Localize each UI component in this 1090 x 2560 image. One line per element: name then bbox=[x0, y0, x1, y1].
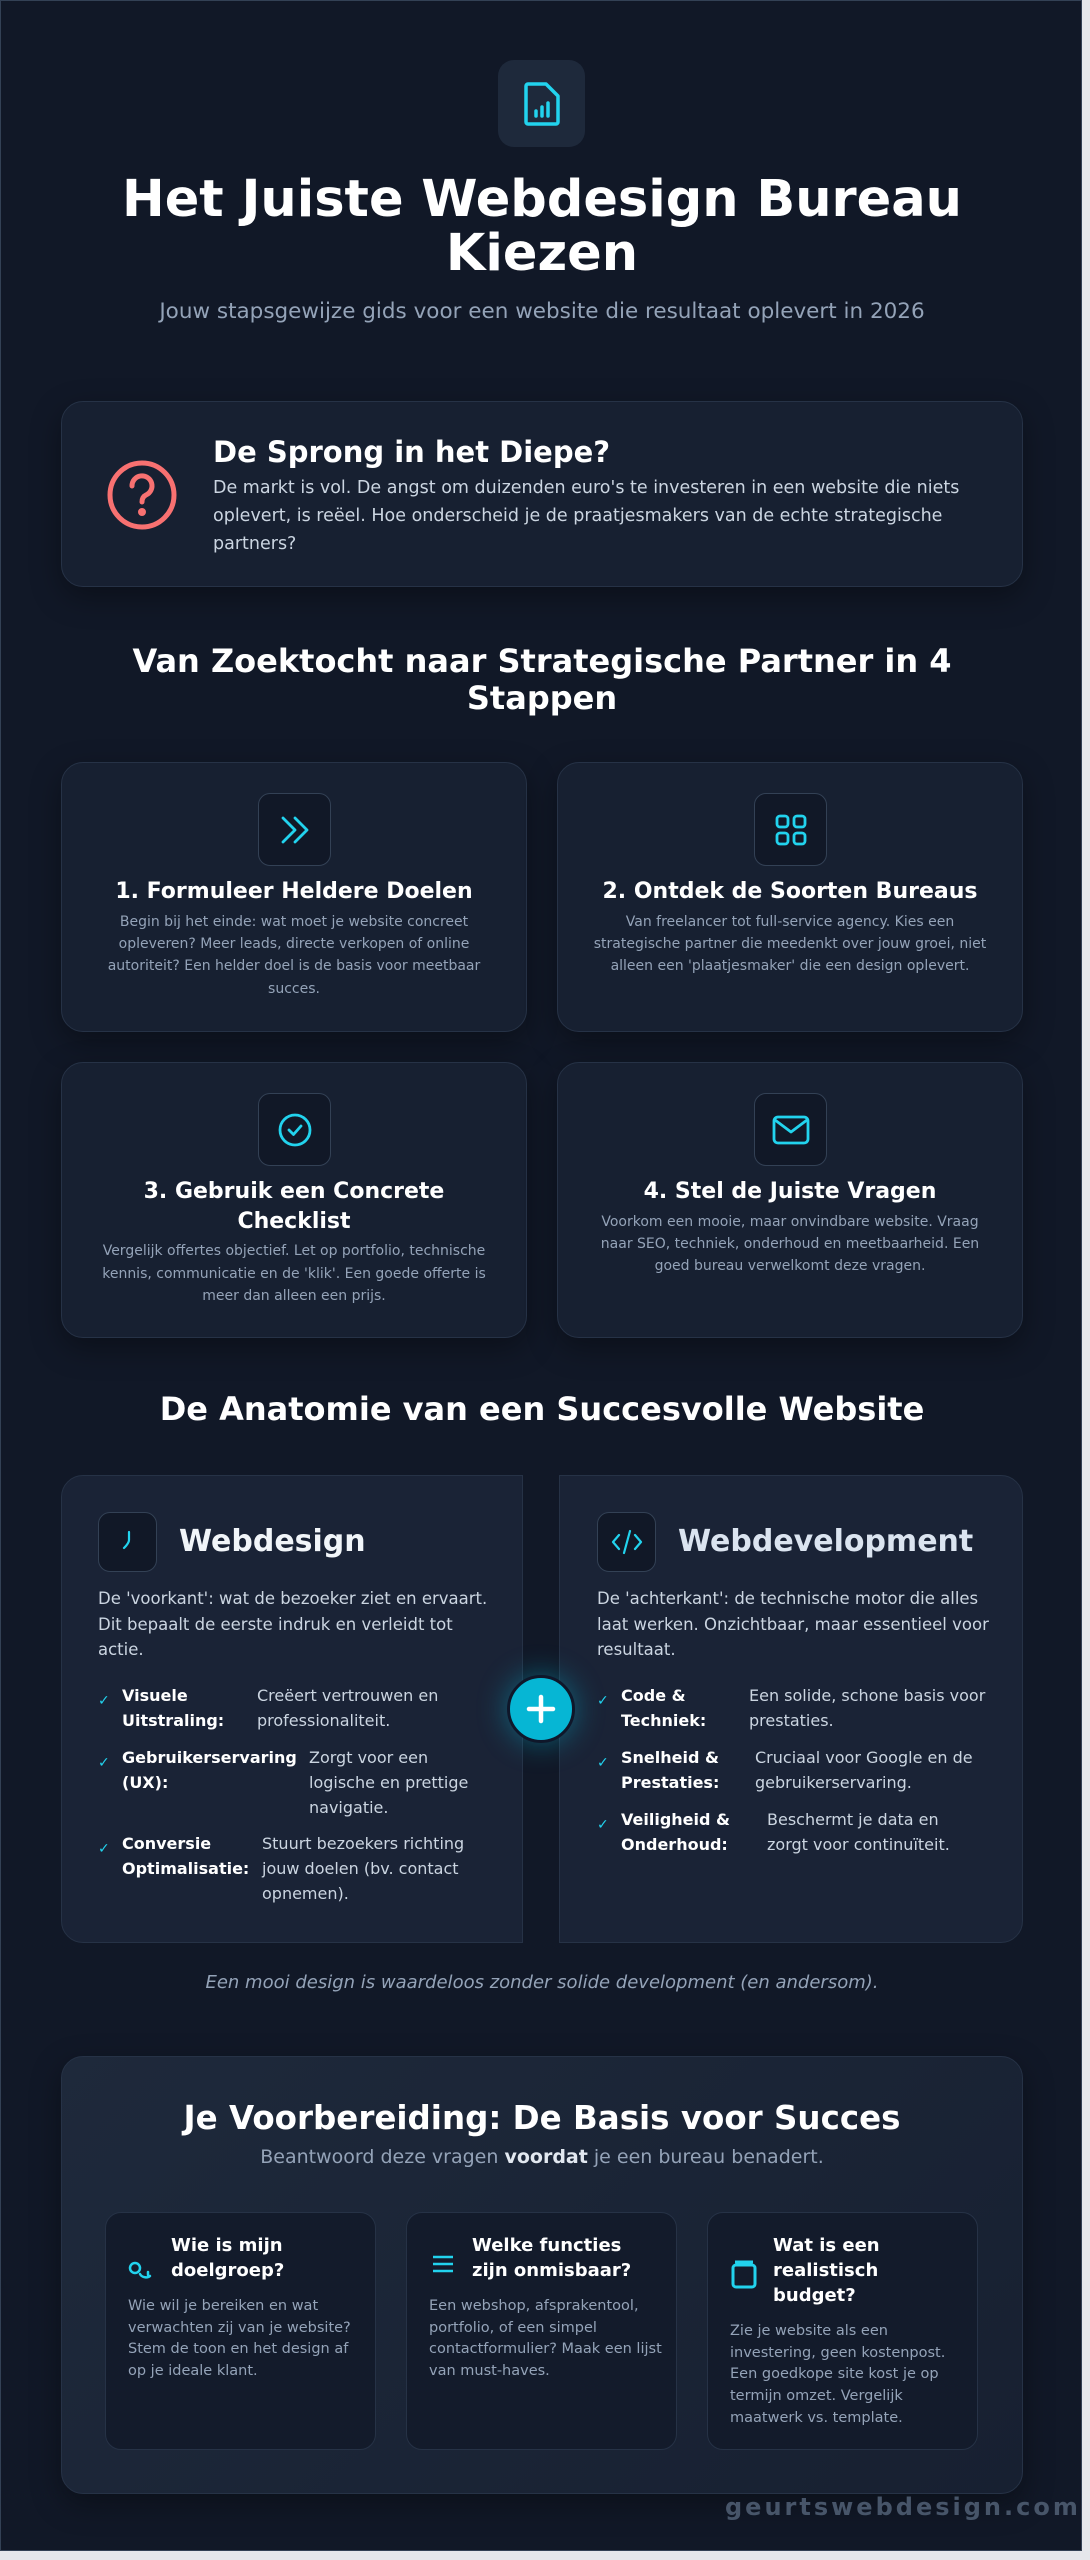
icon: plus circle bbox=[507, 1675, 575, 1743]
icon: mail bbox=[754, 1093, 827, 1166]
list bbox=[98, 1686, 468, 1903]
heading: anatomie: De Anatomie van een Succesvolle Website bbox=[160, 1390, 924, 1428]
text bbox=[594, 879, 986, 974]
item: veiligheid: Veiligheid & Onderhoud: bbox=[621, 1810, 730, 1854]
subtitle: Jouw stapsgewijze gids voor een website die resultaat oplevert in 2026 bbox=[159, 299, 925, 324]
text bbox=[102, 1179, 486, 1304]
watermark: geurtswebdesign.com bbox=[725, 2493, 1081, 2521]
text: 1. Formuleer Heldere Doelen bbox=[115, 879, 473, 904]
icon: question circle bbox=[108, 460, 176, 530]
icon: chevrons bbox=[258, 793, 331, 866]
panel: step 2 bbox=[557, 762, 1023, 1032]
title: Wie is mijn doelgroep? bbox=[171, 2235, 284, 2281]
text: alleen een 'plaatjesmaker' die een design oplevert. bbox=[611, 958, 969, 974]
title bbox=[122, 170, 962, 283]
item: visuele uitstraling: Creëert vertrouwen en professionaliteit. bbox=[257, 1686, 438, 1730]
item: UX: Zorgt voor een logische en prettige navigatie. bbox=[309, 1748, 468, 1817]
card: functies bbox=[406, 2212, 677, 2450]
text: De 'achterkant': de technische motor die alles laat werken. Onzichtbaar, maar essentieel voor resultaat. bbox=[597, 1589, 989, 1659]
icon: grid bbox=[754, 793, 827, 866]
icon: brush bbox=[98, 1512, 157, 1572]
item: snelheid: Cruciaal voor Google en de gebruikerservaring. bbox=[755, 1748, 973, 1792]
panel: voorbereiding bbox=[61, 2056, 1023, 2494]
text: Wie wil je bereiken en wat verwachten zij van je website? Stem de toon en het design af op je ideale klant. bbox=[128, 2298, 351, 2379]
icon: users bbox=[128, 2262, 152, 2279]
item: visuele uitstraling bbox=[98, 1686, 438, 1730]
panel: step 4 bbox=[557, 1062, 1023, 1338]
heading: 4 stappen bbox=[132, 642, 952, 717]
title: Welke functies zijn onmisbaar? bbox=[472, 2235, 631, 2281]
text: Begin bij het einde: wat moet je website concreet opleveren? Meer leads, directe verkopen of online autoriteit? Een helder doel is de basis voor meetbaar succes. bbox=[108, 914, 480, 997]
heading: Webdevelopment bbox=[678, 1524, 973, 1559]
item: veiligheid: ✓ bbox=[597, 1817, 609, 1833]
panel: webdevelopment bbox=[559, 1475, 1023, 1943]
text: Zie je website als een investering, geen kostenpost. Een goedkope site kost je op termijn omzet. Vergelijk maatwerk vs. template. bbox=[730, 2323, 945, 2426]
text: Een webshop, afsprakentool, portfolio, of een simpel contactformulier? Maak een lijst van must-haves. bbox=[429, 2298, 662, 2379]
item: veiligheid: Beschermt je data en zorgt voor continuïteit. bbox=[767, 1810, 950, 1854]
item: UX: Gebruikerservaring (UX): bbox=[122, 1748, 297, 1792]
heading: 4 stappen: Van Zoektocht naar Strategische Partner in 4 bbox=[132, 642, 952, 680]
title: Het Juiste Webdesign Bureau bbox=[122, 170, 962, 229]
text: De markt is vol. De angst om duizenden euro's te investeren in een website die niets oplevert, is reëel. Hoe onderscheid je de praatjesmakers van de echte strategische partners? bbox=[213, 478, 959, 554]
item: snelheid bbox=[597, 1748, 973, 1792]
item: code: ✓ bbox=[597, 1693, 609, 1709]
heading: Webdesign bbox=[179, 1524, 366, 1559]
panel: De Sprong in het Diepe bbox=[61, 401, 1023, 587]
heading: Je Voorbereiding: De Basis voor Succes bbox=[184, 2099, 900, 2137]
subtitle: Beantwoord deze vragen voordat je een bureau benadert. bbox=[260, 2146, 824, 2168]
title: Wat is een realistisch budget? bbox=[773, 2235, 880, 2306]
item: UX: ✓ bbox=[98, 1755, 110, 1771]
list bbox=[597, 1686, 986, 1854]
text: Voorkom een mooie, maar onvindbare website. Vraag naar SEO, techniek, onderhoud en meetbaarheid. Een goed bureau verwelkomt deze vragen. bbox=[601, 1214, 979, 1274]
panel: webdesign bbox=[61, 1475, 523, 1943]
heading: De Sprong in het Diepe? bbox=[213, 435, 610, 469]
item: code: Een solide, schone basis voor prestaties. bbox=[749, 1686, 985, 1730]
item: snelheid: ✓ bbox=[597, 1755, 609, 1771]
item: conversie bbox=[98, 1834, 464, 1903]
item: visuele uitstraling: Visuele Uitstraling: bbox=[122, 1686, 224, 1730]
item: visuele uitstraling: ✓ bbox=[98, 1693, 110, 1709]
icon: wallet bbox=[732, 2260, 756, 2288]
heading: 4 stappen: Stappen bbox=[467, 679, 617, 717]
icon: header document chart bbox=[498, 60, 585, 147]
text: 2. Ontdek de Soorten Bureaus bbox=[602, 879, 977, 904]
item: code bbox=[597, 1686, 986, 1730]
item: conversie: ✓ bbox=[98, 1841, 110, 1857]
text: 3. Gebruik een Concrete Checklist bbox=[144, 1179, 444, 1234]
text: Vergelijk offertes objectief. Let op portfolio, technische kennis, communicatie en de 'klik'. Een goede offerte is meer dan alleen een prijs. bbox=[102, 1243, 486, 1304]
title: Kiezen bbox=[446, 224, 638, 283]
text: 4. Stel de Juiste Vragen bbox=[644, 1179, 936, 1204]
item: snelheid: Snelheid & Prestaties: bbox=[621, 1748, 719, 1792]
icon: code bbox=[597, 1512, 656, 1572]
item: UX bbox=[98, 1748, 468, 1817]
item: conversie: Stuurt bezoekers richting jouw doelen (bv. contact opnemen). bbox=[262, 1834, 464, 1903]
icon: check circle bbox=[258, 1093, 331, 1166]
panel: step 1 bbox=[61, 762, 527, 1032]
text: De 'voorkant': wat de bezoeker ziet en ervaart. Dit bepaalt de eerste indruk en verleidt tot actie. bbox=[98, 1589, 487, 1659]
caption: Een mooi design is waardeloos zonder solide development (en andersom). bbox=[205, 1972, 878, 1993]
panel: step 3 bbox=[61, 1062, 527, 1338]
text: Van freelancer tot full-service agency. Kies een bbox=[626, 914, 954, 930]
card: budget bbox=[707, 2212, 978, 2450]
text bbox=[601, 1179, 979, 1274]
card: doelgroep bbox=[105, 2212, 376, 2450]
item: conversie: Conversie Optimalisatie: bbox=[122, 1834, 249, 1878]
item: code: Code & Techniek: bbox=[621, 1686, 706, 1730]
text: strategische partner die meedenkt over jouw groei, niet bbox=[594, 936, 986, 952]
icon: list bbox=[433, 2256, 453, 2272]
item: veiligheid bbox=[597, 1810, 950, 1854]
